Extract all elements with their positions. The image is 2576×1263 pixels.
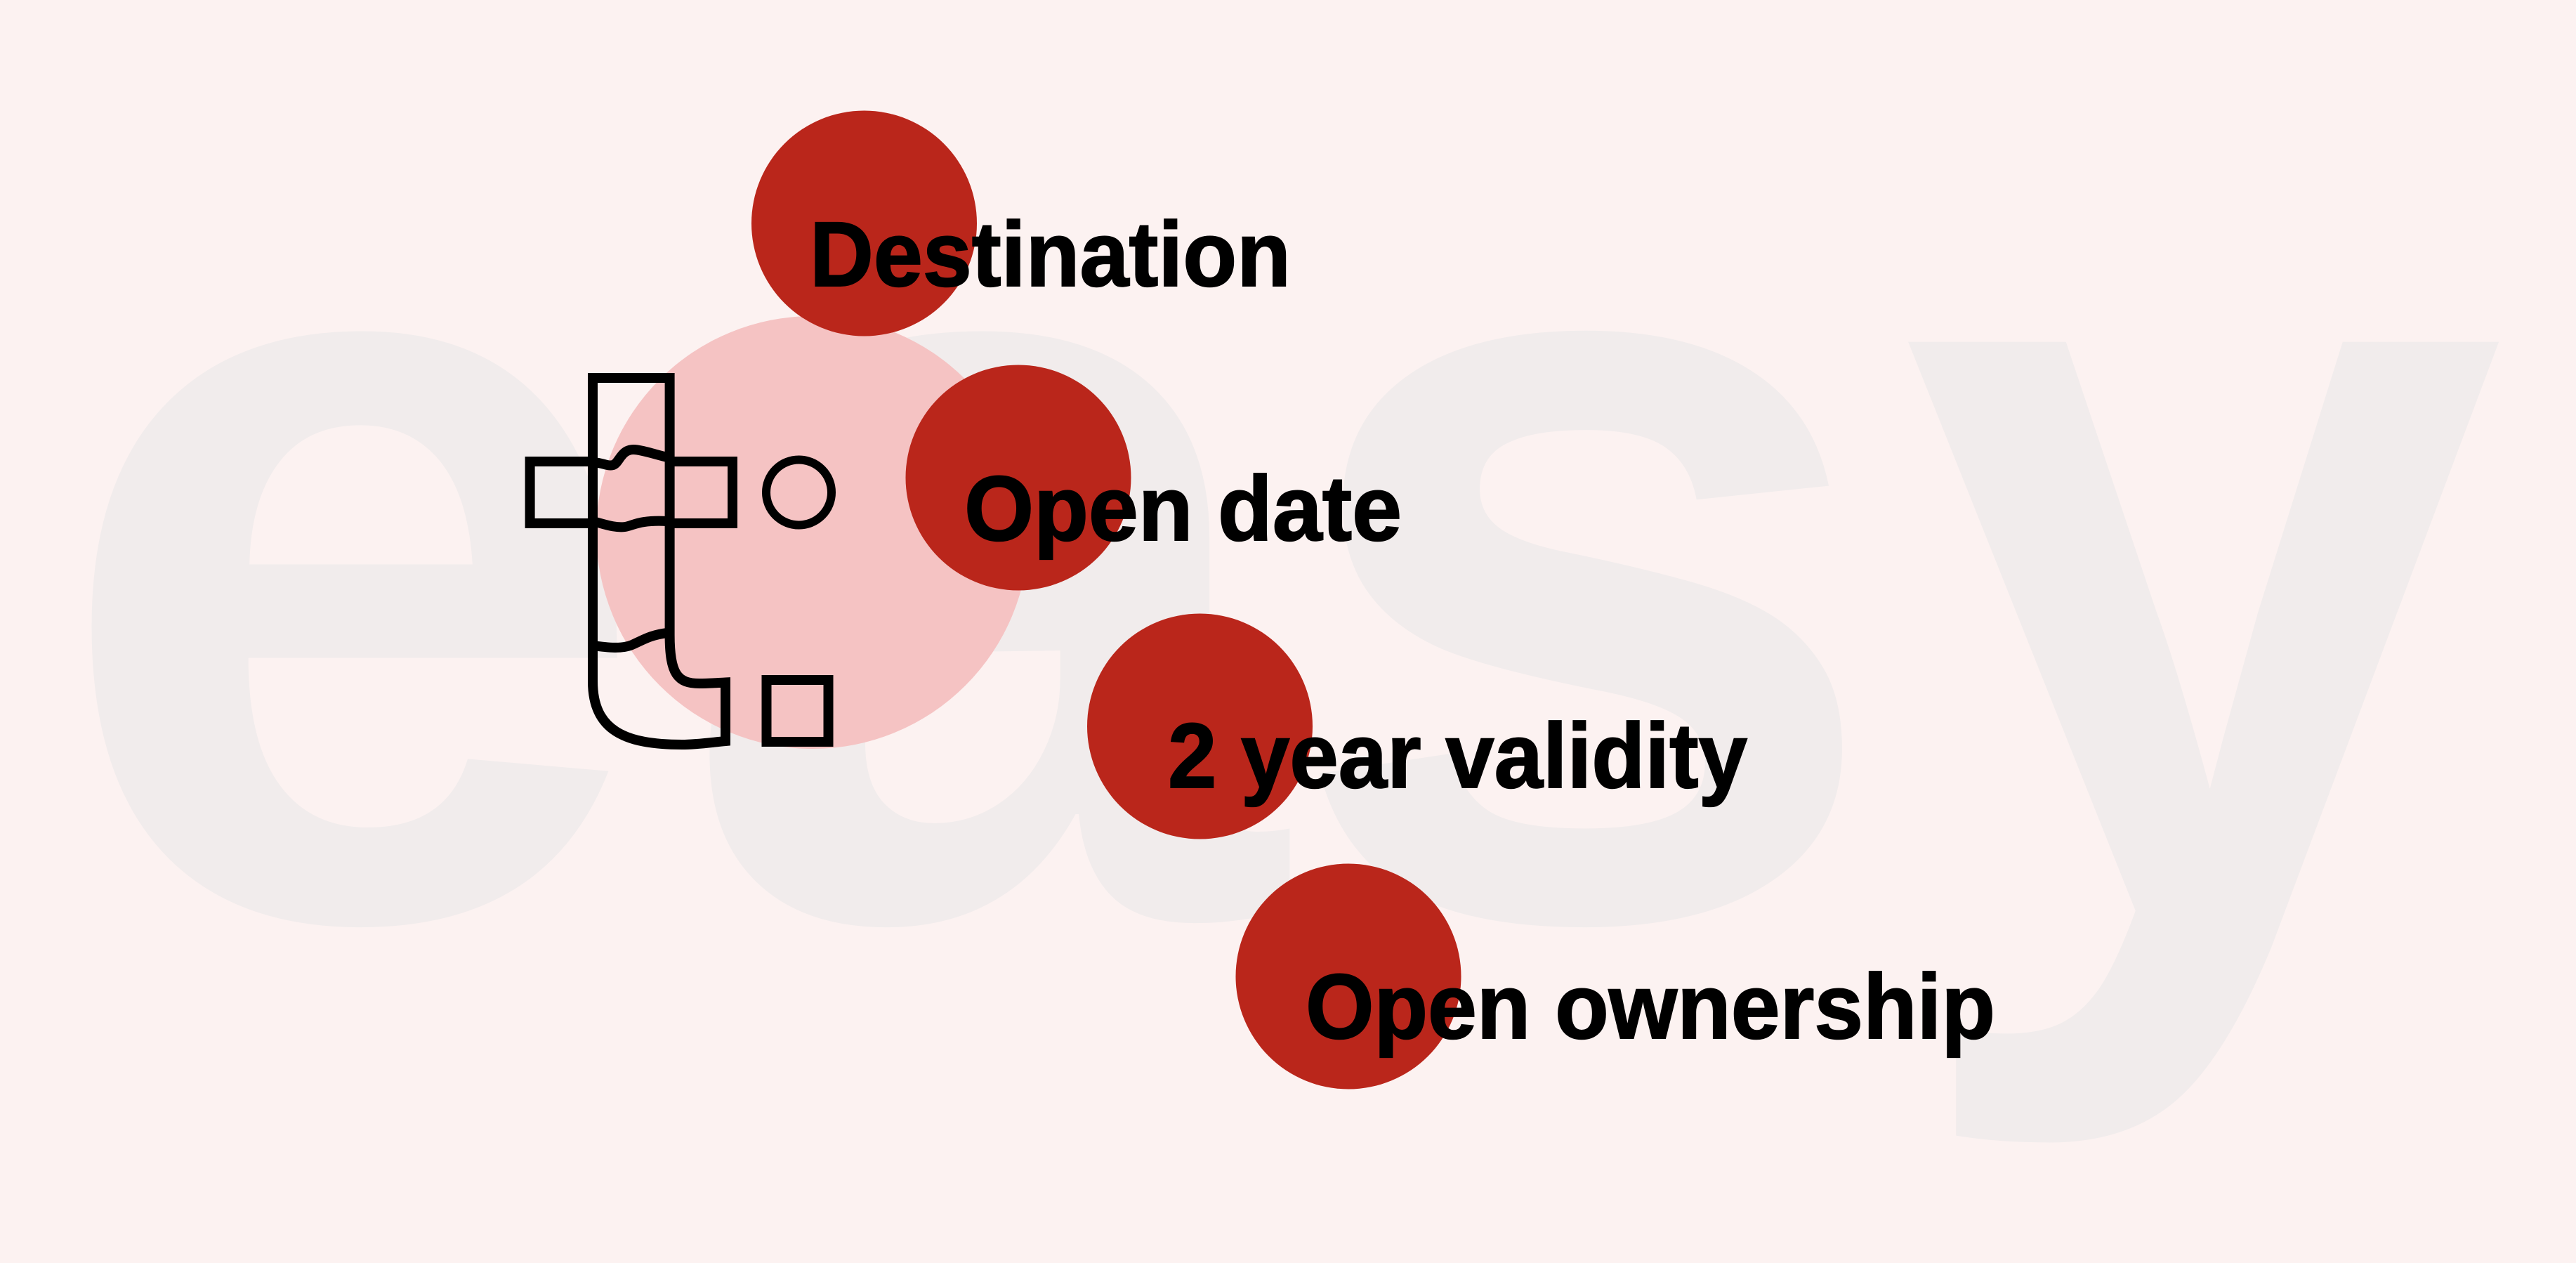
item: Open date [906,365,1402,590]
item: Open ownership: Open ownership [1306,955,1995,1058]
item: Destination: Destination [810,202,1291,306]
item: 2 year validity [1087,614,1747,839]
item: Open date: Open date [964,457,1402,560]
pale pink circle [596,316,1029,749]
item: Open ownership [1236,864,1995,1089]
icon: outlined t mark with dot [530,378,832,745]
item: 2 year validity: 2 year validity [1168,704,1747,807]
item: Destination [751,111,1291,336]
